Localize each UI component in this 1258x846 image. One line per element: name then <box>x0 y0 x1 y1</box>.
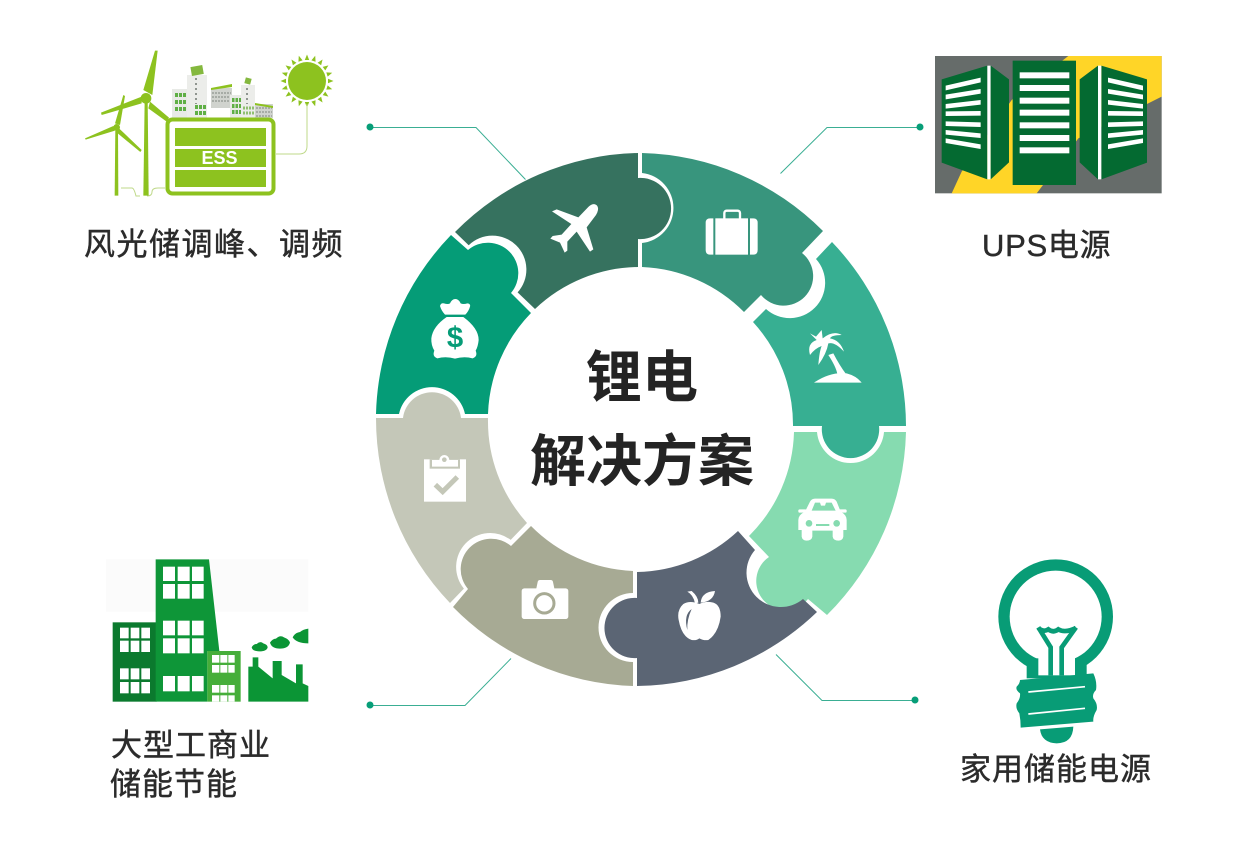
connector: bottom left <box>366 658 511 708</box>
segment: plane <box>455 153 671 309</box>
icon: camera <box>522 580 568 619</box>
center title: 解决方案 <box>530 430 754 493</box>
illustration: UPS servers <box>935 56 1162 193</box>
segment: palm <box>753 242 906 458</box>
label: wind solar storage: 风光储调峰、调频 <box>84 227 344 262</box>
connector: top right <box>780 124 924 174</box>
ESS battery <box>168 120 274 194</box>
icon: money bag <box>431 299 479 359</box>
illustration: light bulb <box>998 559 1113 743</box>
segment: briefcase <box>642 153 823 312</box>
icon: briefcase <box>706 211 758 255</box>
ESS battery: ESS <box>201 148 238 168</box>
illustration: wind solar storage <box>85 51 333 196</box>
icon: car <box>798 499 847 541</box>
puzzle ring <box>376 153 906 686</box>
connector: bottom right <box>776 654 918 704</box>
connector: top left <box>366 124 526 180</box>
label: commercial storage <box>110 728 271 802</box>
center title <box>530 346 754 493</box>
segment: clipboard <box>376 392 527 603</box>
icon: clipboard <box>424 455 466 502</box>
label: home storage: 家用储能电源 <box>960 752 1152 787</box>
power line <box>121 104 307 196</box>
illustration: factory buildings <box>106 559 308 702</box>
city skyline <box>172 65 273 118</box>
wind turbines <box>85 51 169 196</box>
label: commercial storage: 大型工商业 <box>111 728 271 763</box>
label: commercial storage: 储能节能 <box>110 767 238 802</box>
icon: palm island <box>809 330 862 383</box>
icon: plane <box>550 204 598 253</box>
segment: money bag <box>376 235 531 414</box>
icon: money bag: $ <box>447 321 463 354</box>
segment: camera <box>453 526 633 686</box>
label: UPS: UPS电源 <box>982 228 1111 263</box>
segment: car <box>749 432 906 615</box>
sun <box>280 54 334 108</box>
segment: apple <box>604 531 817 686</box>
icon: apple <box>678 591 721 640</box>
center title: 锂电 <box>586 346 698 409</box>
